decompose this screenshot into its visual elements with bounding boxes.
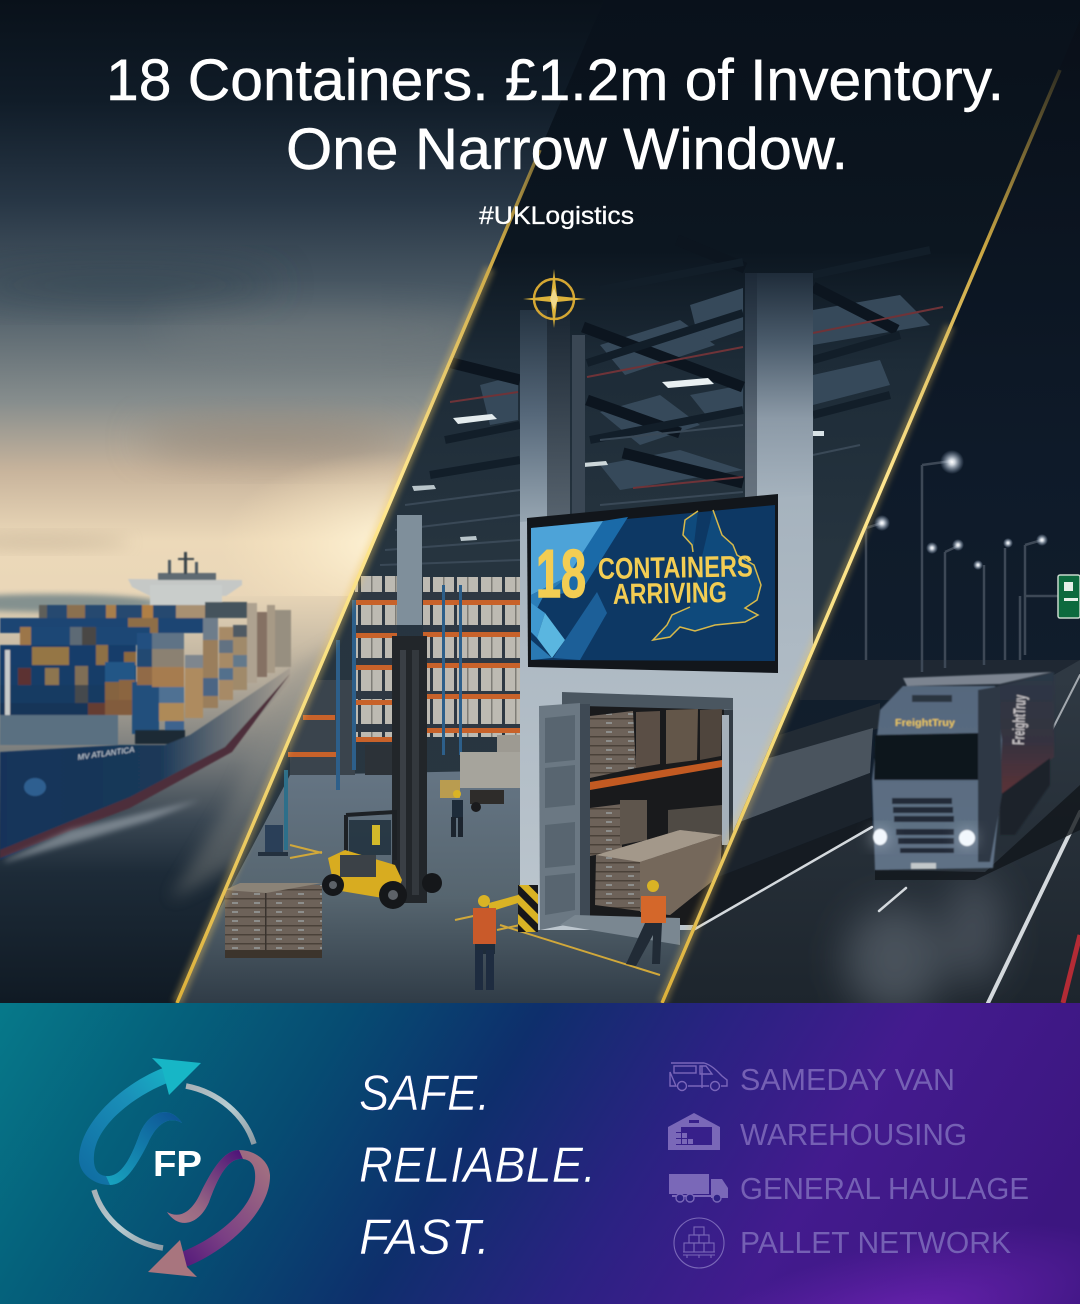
road surface	[640, 660, 1080, 1003]
title	[106, 48, 1004, 182]
warehouse background	[217, 283, 967, 914]
reach truck and distant worker	[440, 752, 520, 837]
logo top arrow	[79, 1058, 201, 1185]
footer background	[0, 1003, 1080, 1304]
label: warehousing: WAREHOUSING	[740, 1117, 967, 1152]
dock step	[560, 915, 680, 945]
panel: footer band	[0, 1003, 1080, 1304]
cargo ship	[0, 552, 291, 860]
background lot	[800, 660, 1080, 700]
pallets	[225, 883, 322, 958]
service: warehousing	[668, 1113, 967, 1152]
central barrier	[700, 773, 872, 884]
windscreen	[874, 733, 978, 780]
opposite carriageway	[700, 728, 873, 837]
roof spoiler vent	[912, 695, 952, 702]
logo arcs	[94, 1086, 254, 1248]
trailer	[903, 672, 1054, 835]
label: pallet network: PALLET NETWORK	[740, 1225, 1011, 1260]
strapline: fast: FAST.	[359, 1209, 490, 1265]
panel: ship at sunset	[0, 101, 560, 988]
road light reflection	[845, 875, 1003, 1015]
pallet racks	[284, 576, 521, 850]
ship wake	[5, 800, 200, 862]
ceiling beams	[380, 240, 943, 565]
loading bay opening	[562, 692, 733, 925]
map of england outline	[653, 510, 761, 640]
cab	[872, 686, 1002, 870]
truck shadow	[875, 785, 1080, 880]
service: sameday van	[670, 1062, 955, 1097]
panel: night motorway	[640, 0, 1080, 1015]
headlight glow	[872, 829, 975, 846]
left gold divider	[177, 150, 540, 1003]
panel: warehouse	[179, 246, 967, 1003]
green motorway sign	[1058, 575, 1080, 618]
night sky	[640, 0, 1080, 1003]
strapline: safe: SAFE.	[359, 1065, 490, 1121]
strapline: reliable: RELIABLE.	[359, 1137, 596, 1193]
ship superstructure block	[0, 715, 118, 745]
red tail light streak	[1063, 935, 1080, 1003]
screen subheading: ARRIVING	[613, 577, 727, 611]
headlights	[873, 829, 887, 845]
forklift	[322, 636, 442, 909]
logo letters: FP	[153, 1143, 202, 1184]
left pillar	[520, 310, 570, 525]
hazard post	[518, 885, 538, 932]
ship hull	[0, 668, 290, 860]
icon: warehouse	[668, 1113, 720, 1150]
red waterline	[0, 674, 290, 858]
sunset sky	[0, 101, 560, 596]
container door	[539, 703, 590, 930]
screen heading: CONTAINERS	[598, 550, 753, 586]
service: pallet network	[674, 1218, 1011, 1268]
lane markings	[695, 675, 1080, 1003]
icon: truck	[669, 1174, 728, 1202]
hashtag: #UKLogistics	[479, 202, 634, 230]
label: sameday van: SAMEDAY VAN	[740, 1062, 955, 1097]
title line 2: One Narrow Window.	[286, 117, 848, 182]
back pillar	[397, 515, 422, 625]
lit ceiling panels	[480, 288, 930, 490]
mast	[5, 650, 10, 715]
container stacks	[0, 602, 291, 744]
trailer logo: FreightTruy	[1009, 694, 1030, 745]
title line 1: 18 Containers. £1.2m of Inventory.	[106, 48, 1004, 113]
hull name: MV ATLANTICA	[77, 745, 135, 762]
floor markings	[290, 845, 660, 975]
cab side panel	[978, 686, 1002, 862]
cab brand: FreightTruy	[895, 718, 955, 729]
services list	[668, 1062, 1029, 1268]
icon: gold compass emblem	[523, 269, 586, 328]
lorry	[872, 672, 1054, 870]
street lights	[866, 450, 1078, 672]
number plate	[911, 863, 936, 869]
service: general haulage	[669, 1171, 1029, 1206]
upper barrier	[700, 703, 880, 778]
yellow barrier	[489, 895, 518, 910]
worker at door	[626, 880, 666, 966]
warehouse floor	[186, 772, 691, 998]
right pillar	[745, 273, 813, 503]
lower verge	[695, 817, 872, 929]
grille	[892, 798, 954, 853]
loading wall	[520, 495, 813, 930]
side worker	[258, 825, 288, 856]
screen: 18 containers arriving	[527, 494, 778, 673]
strapline	[359, 1065, 596, 1265]
bow thruster mark	[24, 778, 46, 796]
screen number: 18	[536, 536, 586, 612]
ladder pipe	[572, 335, 585, 515]
worker in orange	[473, 895, 496, 990]
icon: pallet boxes	[674, 1218, 724, 1268]
ceiling lights	[412, 378, 824, 541]
right gold divider	[662, 70, 1060, 1003]
label: general haulage: GENERAL HAULAGE	[740, 1171, 1029, 1206]
logo: FP	[79, 1058, 270, 1277]
sea	[0, 590, 348, 1003]
logo bottom arrow	[148, 1150, 270, 1277]
ship bridge	[128, 552, 242, 605]
icon: van	[670, 1063, 727, 1090]
